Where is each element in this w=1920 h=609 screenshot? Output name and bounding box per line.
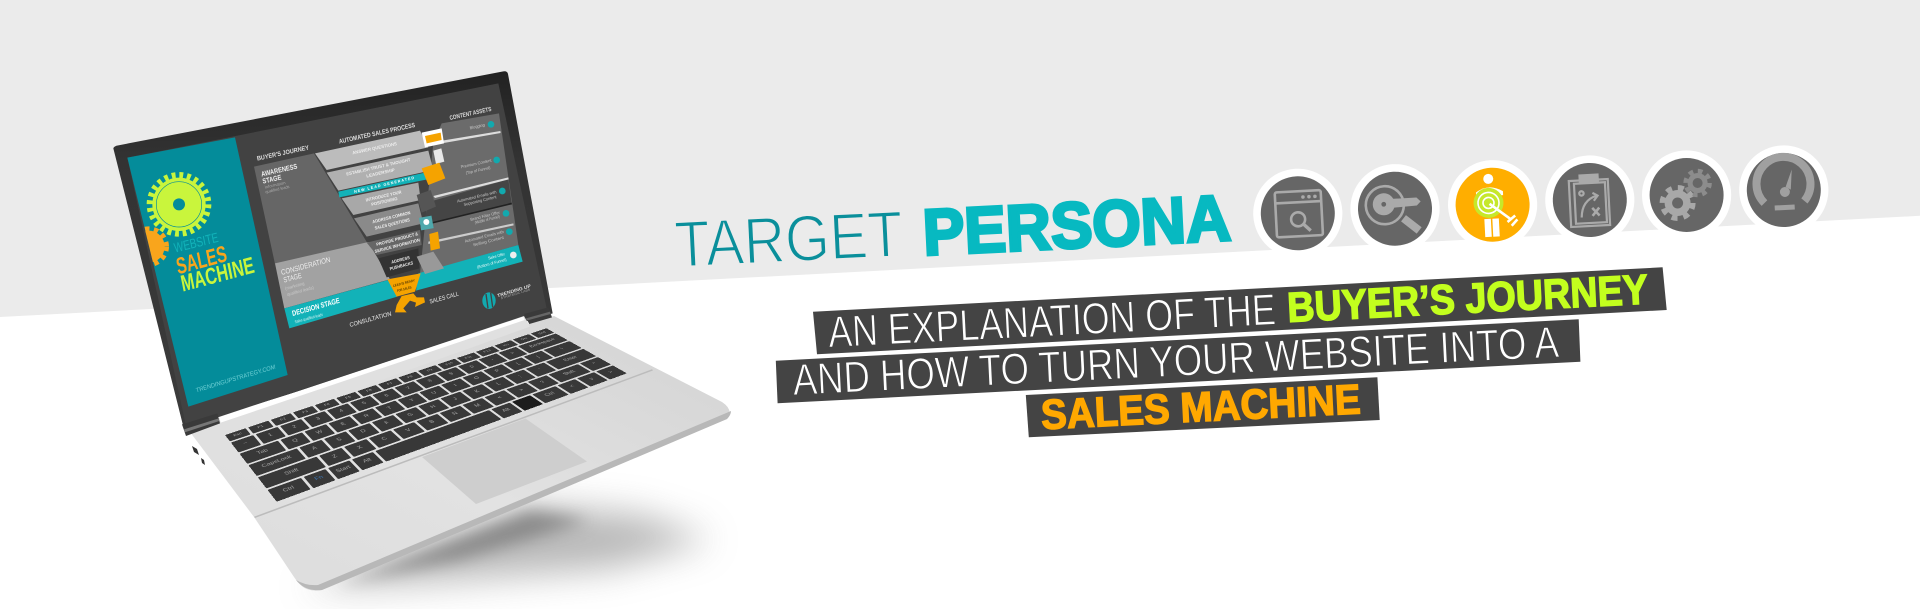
key row: shift row: N (450, 411, 459, 416)
key row: home row: Enter (562, 355, 579, 362)
icon: strategy clipboard (1543, 153, 1637, 247)
key row: numbers: 2 (291, 424, 298, 429)
key row: numbers: - (489, 358, 495, 361)
slide: funnel labels (346, 141, 420, 293)
key row: qwerty: I (452, 383, 458, 387)
side ports (192, 446, 205, 465)
slide: column headings: AUTOMATED SALES PROCESS (338, 122, 416, 146)
slide: content asset labels: Selling Content (473, 235, 505, 247)
slide: awareness stage block (254, 153, 388, 278)
slide: stage labels: STAGE (262, 173, 282, 186)
key row: bottom row: Alt (500, 407, 512, 413)
key row: numbers: 0 (468, 365, 475, 369)
key row: function keys: Del (519, 337, 529, 341)
key row: home row: D (359, 428, 367, 434)
subtitle line 1 (813, 266, 1667, 357)
key row: function keys: F3 (301, 409, 309, 414)
key row: qwerty: [ (515, 362, 521, 365)
key row: shift row: V (404, 427, 412, 433)
key row: shift row: > (517, 387, 525, 392)
key row: home row: A (310, 445, 318, 451)
key row: shift row: Z (331, 453, 338, 459)
laptop base (187, 316, 731, 591)
slide: column headings (256, 106, 492, 163)
slide: funnel labels: LEAD IS READY (393, 278, 416, 288)
slide: stage labels: Sales qualified leads (294, 312, 323, 324)
key row: home row (248, 349, 596, 476)
key row: shift row: C (380, 436, 388, 441)
key row: bottom row: Fn (313, 474, 325, 481)
key row: function keys: F1 (256, 424, 264, 429)
key row: function keys: End (537, 331, 547, 335)
key row: numbers: 7 (405, 386, 412, 390)
key row: numbers: 1 (267, 432, 273, 437)
key row: home row: S (335, 437, 343, 442)
key row: shift row: B (428, 419, 436, 424)
key row: function keys: Ins (501, 343, 510, 347)
slide: right panel rows (420, 113, 518, 273)
slide: funnel labels: PUSHBACKS (389, 260, 414, 271)
key row: shift row: Shift (283, 467, 300, 476)
key row: home row: K (473, 389, 481, 393)
slide: content asset labels (457, 122, 507, 270)
key row: numbers: 6 (383, 393, 390, 398)
slide: stage labels: information (264, 180, 286, 190)
key row: shift row: Shift (561, 369, 577, 376)
key row: bottom row (268, 366, 627, 502)
slide: stage labels (260, 162, 340, 324)
white reflection bar (219, 317, 525, 423)
slide: content asset labels: Supporting Content (463, 194, 498, 207)
icon: website search (1251, 166, 1345, 260)
slide: content asset labels: (Bottom of Funnel) (477, 257, 507, 270)
slide: column headings: BUYER'S JOURNEY (256, 144, 310, 163)
lid bezel (113, 71, 553, 427)
key row: numbers: 8 (426, 379, 434, 383)
key row: qwerty: ] (535, 355, 541, 358)
slide: stage labels: CONSIDERATION (280, 255, 331, 277)
key row: function keys: F11 (463, 355, 473, 359)
slide: Trending Up logo (482, 283, 532, 309)
key row: home row: ' (537, 367, 543, 371)
slide: Trending Up logo: TRENDING UP (497, 283, 532, 299)
key row: numbers: ~ (242, 440, 249, 446)
key row: bottom row: < (568, 384, 576, 388)
slide: funnel labels: ANSWER QUESTIONS (352, 141, 397, 155)
screen surface (127, 83, 547, 426)
slide: consultation and sales call labels (349, 291, 460, 329)
key row: home row: J (452, 397, 459, 401)
key row: shift row (258, 357, 610, 488)
key row: qwerty: Y (408, 398, 416, 402)
left hinge (182, 413, 220, 436)
slide: orange consultation and sales arrows (395, 293, 425, 312)
slide: funnel rows (315, 131, 433, 297)
key row: home row: CapsLock (260, 454, 293, 468)
key row: function keys: F9 (426, 368, 434, 372)
key row: function keys: F5 (344, 395, 352, 400)
key row: qwerty: Q (291, 437, 299, 443)
key row: shift row: X (355, 444, 364, 450)
key row: home row: H (429, 404, 437, 409)
slide: stage labels: qualified leads (265, 184, 290, 194)
cover title (173, 230, 256, 297)
cover title: MACHINE (179, 252, 256, 297)
key row: bottom row: Start (334, 464, 352, 474)
key row: numbers: Backspace (528, 337, 556, 348)
key row: qwerty: R (362, 413, 370, 418)
key row: bottom row: Ctrl (543, 391, 556, 397)
slide: column headings: CONTENT ASSETS (449, 106, 492, 122)
key row: numbers: 3 (315, 416, 321, 421)
cover title: SALES (174, 240, 229, 279)
key row: qwerty (240, 341, 581, 464)
front lip line (254, 369, 653, 518)
key row: function keys: Esc (232, 431, 243, 437)
subtitle line 1: AN EXPLANATION OF THE (827, 285, 1277, 357)
slide: decision stage band (284, 245, 523, 328)
slide: stage labels: STAGE (283, 271, 302, 285)
orange gear (144, 226, 169, 266)
slide: funnel labels: ESTABLISH TRUST & THOUGHT (346, 157, 411, 177)
key row: qwerty: U (430, 390, 438, 395)
key row: numbers (231, 334, 568, 452)
title: PERSONA (921, 181, 1232, 269)
key row: qwerty: T (386, 405, 393, 410)
slide: stage labels: qualified leads) (287, 285, 315, 297)
slide: funnel labels: PROVIDE PRODUCT & (376, 231, 419, 247)
slide: consultation and sales call labels: SALES CALL (429, 291, 460, 306)
slide: stage labels: AWARENESS (260, 162, 298, 179)
key row: function keys: F7 (386, 381, 394, 386)
key row: numbers: 5 (361, 401, 368, 405)
slide: funnel labels: ADDRESS COMMON (372, 210, 411, 224)
icon: gears (1642, 150, 1731, 240)
slide: content asset labels: (Top of Funnel) (465, 165, 491, 175)
slide: content asset labels: Sales Offer (488, 251, 506, 261)
slide: consideration stage block (275, 242, 390, 308)
key row: bottom row: > (606, 370, 615, 374)
laptop keyboard (225, 328, 627, 502)
cover title: WEBSITE (173, 230, 220, 256)
title: TARGET (673, 197, 904, 281)
slide: teal cover panel (127, 137, 288, 407)
key row: function keys: F2 (279, 417, 287, 421)
trackpad (422, 418, 587, 504)
slide: content asset labels: Automated Emails with (464, 229, 505, 244)
icon: target persona (highlighted) (1446, 158, 1539, 252)
laptop shadow (300, 505, 712, 590)
right hinge (524, 307, 552, 324)
slide: funnel labels: SALES QUESTIONS (374, 217, 410, 231)
key row: qwerty: E (339, 421, 347, 426)
key row: function keys: F12 (482, 349, 492, 353)
subtitle line 3: SALES MACHINE (1040, 375, 1362, 438)
subtitle line 2: AND HOW TO TURN YOUR WEBSITE INTO A (792, 318, 1561, 405)
slide: content asset labels: (Middle of Funnel) (474, 214, 501, 225)
slide: Trending Up logo: STRATEGIC LABS (500, 288, 531, 300)
key row: function keys: F4 (323, 402, 331, 407)
key row: shift row: < (495, 395, 504, 400)
icon: keyword magnifier (1348, 162, 1442, 256)
slide: funnel assets icons (417, 128, 445, 274)
slide: funnel labels: SERVICE INFORMATION (374, 237, 420, 254)
key row: numbers: 9 (447, 372, 455, 376)
key row: qwerty: Tab (255, 448, 269, 455)
key row: qwerty: P (493, 369, 501, 373)
yellow-green gear (150, 175, 208, 233)
title (673, 181, 1232, 281)
key row: function keys: F10 (444, 361, 454, 366)
slide: content asset labels: Premium Content (460, 157, 493, 169)
cover url: TRENDINGUPSTRATEGY.COM (195, 364, 276, 394)
key row: qwerty: W (315, 429, 324, 435)
laptop lid and screen (113, 71, 553, 437)
key row: shift row: M (473, 403, 482, 408)
slide: funnel labels: LEADERSHIP (366, 167, 395, 179)
slide: funnel labels: FOR SALES (397, 285, 412, 293)
slide: stage labels: DECISION STAGE (291, 296, 340, 318)
key row: home row: G (406, 412, 415, 417)
slide: funnel labels: NEW LEAD GENERATED (354, 176, 415, 194)
key row: shift row: ^ (591, 362, 598, 365)
slide: content asset badges (488, 121, 517, 258)
key row: function keys: F6 (365, 388, 373, 392)
icon: speedometer (1737, 143, 1831, 237)
key row: home row: L (495, 381, 502, 386)
key row: bottom row: Ctrl (281, 485, 296, 493)
slide: content asset labels: Automated Emails with (457, 189, 497, 204)
key row: shift row: ? (538, 380, 546, 384)
slide: content asset labels: Brand Filter Offer (470, 210, 501, 222)
silver hinge bar (217, 316, 530, 437)
key row: numbers: 4 (338, 408, 345, 413)
key row: bottom row: v (587, 377, 596, 381)
key row: home row: ; (516, 374, 523, 378)
slide: funnel labels: POSITIONING (371, 196, 398, 207)
key row: numbers: = (508, 351, 516, 355)
subtitle line 1: BUYER’S JOURNEY (1286, 266, 1649, 331)
key row: bottom row: Alt (361, 457, 373, 464)
slide: consultation and sales call labels: CONSULTATION (349, 310, 392, 329)
key row: function keys: F8 (406, 375, 414, 379)
slide: funnel labels: INTRODUCE YOUR (365, 189, 403, 203)
key row: function keys (225, 328, 554, 442)
background: slanted grey band (0, 0, 1920, 317)
key row: home row: F (383, 420, 391, 425)
key row: qwerty: O (472, 376, 481, 380)
slide: funnel labels: ADDRESS (391, 255, 410, 265)
key row: qwerty: \ (559, 347, 565, 350)
slide: stage labels: (marketing (285, 281, 305, 291)
slide: content asset labels: Blogging (469, 122, 485, 130)
